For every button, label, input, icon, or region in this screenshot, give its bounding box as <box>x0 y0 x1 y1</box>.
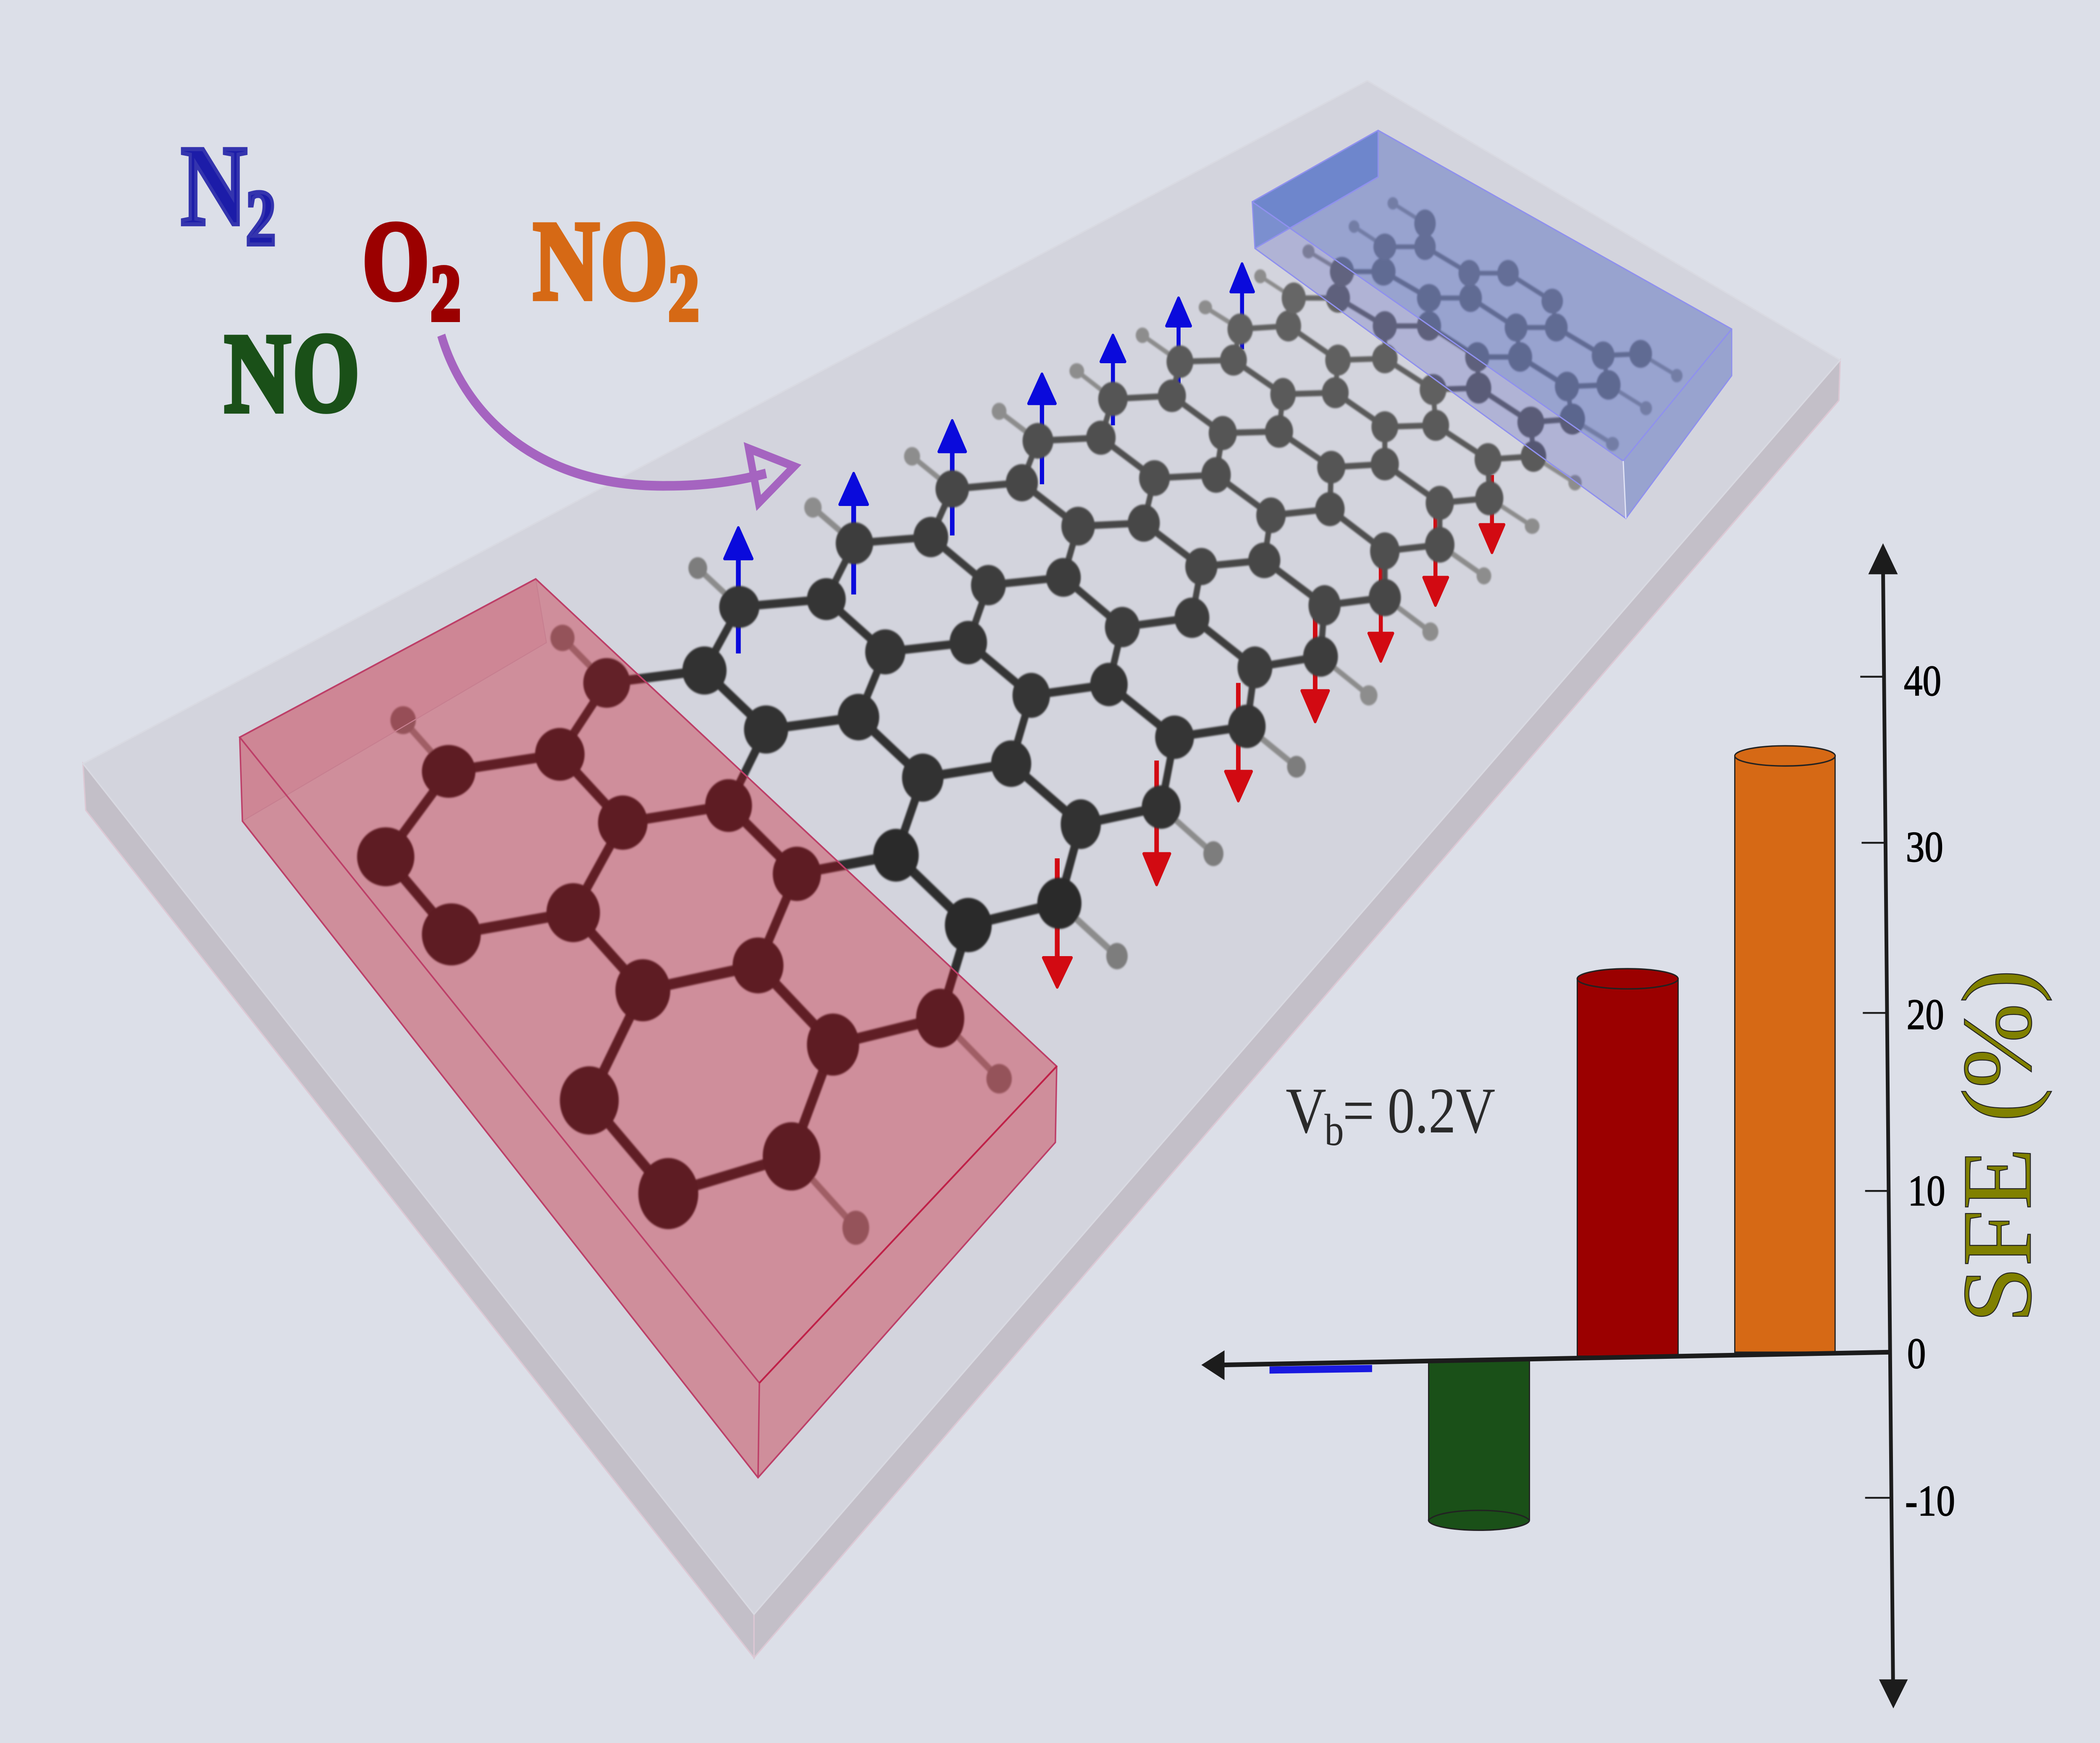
carbon bonds <box>386 223 1641 1194</box>
label: NO2: 2 <box>668 249 699 337</box>
carbon atoms <box>357 210 1652 1229</box>
bar: NO green <box>1428 1361 1530 1530</box>
label: N2 <box>181 122 276 262</box>
label: NO2: O <box>601 198 668 323</box>
bias voltage label: b <box>1324 1105 1344 1155</box>
hydrogen atoms, front <box>391 557 1306 1245</box>
tick labels: 40 <box>1904 657 1941 705</box>
spin up arrows <box>724 264 1254 653</box>
spin filter efficiency chart <box>1201 543 2052 1709</box>
tick labels: 30 <box>1906 823 1943 871</box>
y axis with arrows <box>1868 543 1908 1709</box>
label: O2 <box>362 198 461 337</box>
label: NO2: N <box>533 198 599 323</box>
tick labels <box>1904 657 1955 1525</box>
label: NO: N <box>224 310 291 436</box>
tick labels: 20 <box>1907 991 1944 1038</box>
red contact box <box>240 579 1057 1478</box>
tick labels: 10 <box>1908 1166 1945 1215</box>
label: NO2 <box>533 198 699 337</box>
tick labels: 0 <box>1907 1329 1926 1378</box>
y axis title: SFE (%) <box>1942 969 2052 1323</box>
axis ticks <box>1860 677 1891 1498</box>
platform: substrate slab <box>83 81 1840 1658</box>
curved purple arrow <box>441 335 794 503</box>
label: N2: 2 <box>246 174 276 262</box>
tick labels: -10 <box>1905 1477 1955 1525</box>
bias voltage label: 0.2V <box>1388 1075 1495 1147</box>
bias voltage label: = <box>1343 1075 1374 1147</box>
blue contact box <box>1252 130 1732 519</box>
hydrogen atoms, rear <box>804 197 1683 705</box>
graphene nanoribbon molecule <box>357 197 1683 1245</box>
label: N2: N <box>181 122 247 249</box>
label: O2: O <box>362 198 429 323</box>
bar: N2 blue <box>1270 1365 1372 1373</box>
bias voltage label: V <box>1286 1075 1326 1147</box>
label: NO: O <box>293 309 360 435</box>
label: O2: 2 <box>430 249 461 337</box>
gas molecule labels <box>181 122 699 436</box>
bar: O2 red <box>1577 969 1678 1356</box>
bias voltage label <box>1286 1075 1495 1155</box>
label: NO <box>224 309 360 436</box>
x axis with arrow <box>1201 1350 1889 1380</box>
bar: NO2 orange <box>1735 746 1835 1352</box>
hydrogen bonds <box>403 203 1677 1228</box>
spin down arrows <box>1043 475 1504 987</box>
